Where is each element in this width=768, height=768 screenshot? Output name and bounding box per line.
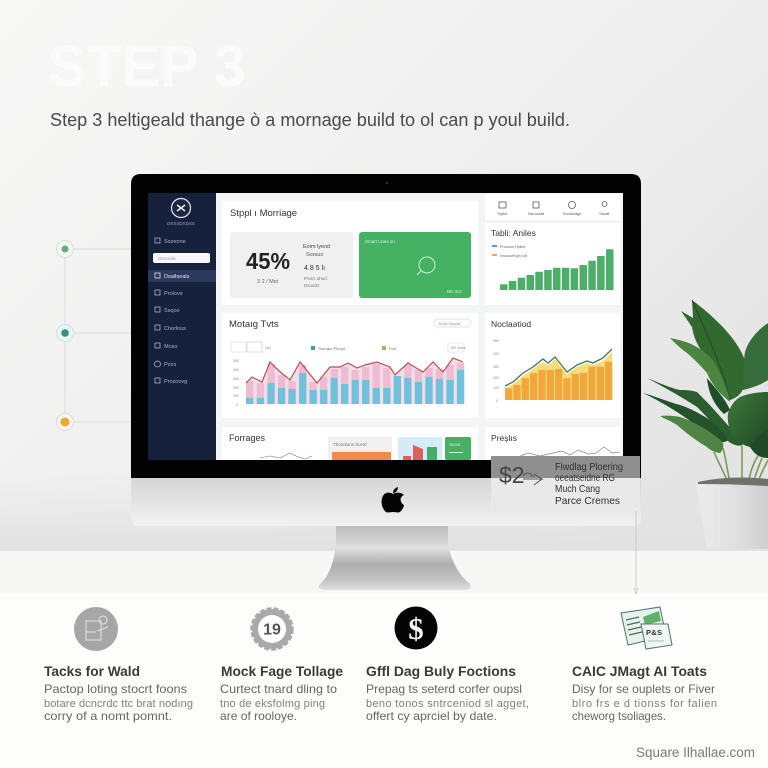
chart axis labels: 0: [236, 403, 238, 407]
panel: green bar chart: [485, 223, 620, 305]
chart controls: BS Sdcs: [451, 346, 466, 350]
stat card: Eoim lyend: [303, 244, 330, 250]
green trend line: [505, 349, 612, 386]
sidebar menu: Prosoovg: [164, 379, 187, 385]
heading: CAIC JMagt AI Toats: [572, 664, 707, 679]
overlay text: oeeatseidne RG: [555, 473, 615, 484]
body text: blro frs e d tionss for falien: [572, 698, 717, 710]
panel: orange area chart: [485, 313, 620, 418]
stat card: Dsoulst: [304, 283, 320, 288]
overlay text: Fiwdlag Ploering: [555, 462, 623, 473]
icon: documents: [621, 607, 672, 649]
body text: botare dcncrdc ttc brat nodıng: [44, 698, 193, 710]
screen: [148, 193, 623, 460]
pink area: [246, 358, 463, 404]
red trend line: [246, 358, 463, 383]
plant pot: [696, 478, 768, 549]
gray sub card: Thorstlons SuHd: [333, 442, 367, 447]
heading: Gffl Dag Buly Foctions: [366, 664, 516, 679]
chart axis labels: 200: [233, 386, 239, 390]
green bars: [500, 249, 614, 290]
big percentage: 45%: [246, 248, 290, 274]
chart axis labels: 400: [493, 352, 499, 356]
search box: Dsrcsork: [158, 256, 176, 261]
body text: [220, 682, 337, 723]
stat card: 3 2 / Mst: [257, 279, 279, 285]
sidebar brand: DSSSDSDSS: [167, 221, 195, 226]
chart controls: Sweıgsr Pleqırt: [318, 346, 346, 351]
icon: dollar badge: $: [408, 611, 424, 646]
chart axis labels: 400: [233, 368, 239, 372]
overlay caption card: [491, 456, 640, 511]
chart axis labels: 300: [493, 365, 499, 369]
overlay text: Much Cang: [555, 484, 600, 495]
body text: Pactop loting stocrt foons: [44, 682, 187, 696]
column: mock page: [220, 608, 343, 723]
stat card: 4.8 5 lı: [304, 265, 325, 272]
overlay text: Parce Cremes: [555, 496, 620, 507]
body text: are of rooloye.: [220, 709, 297, 723]
wall shadow: [0, 470, 768, 552]
pink bars: [246, 363, 464, 404]
chart controls: [231, 342, 466, 352]
body text: corry of a nomt pomnt.: [44, 709, 172, 723]
stat card: Procs ahud: [304, 276, 327, 281]
monitor chin: [131, 478, 641, 526]
filter pill: [434, 319, 471, 327]
panel heading: Stppl ı Morriage: [230, 208, 297, 219]
body text: beno tonos sntrceniod sl agget,: [366, 698, 529, 710]
monitor: [131, 174, 641, 526]
stat card: Sorsus: [306, 252, 323, 258]
column: tasks: [44, 607, 193, 723]
heading: Mock Fage Tollage: [221, 664, 343, 679]
chart controls: Tmd: [388, 346, 396, 351]
green card: Bls 3oz: [447, 289, 463, 294]
node: teal: [56, 324, 74, 342]
body text: offert cy aprciel by date.: [366, 709, 497, 723]
sidebar logo: [172, 198, 190, 218]
chart axis labels: [233, 359, 239, 407]
green card: [359, 232, 471, 298]
sidebar menu: Sozeone: [164, 239, 186, 245]
panel: icon toolbar: Toptot: [497, 212, 508, 216]
sidebar menu: [154, 238, 190, 385]
panel heading: Forrages: [229, 433, 266, 443]
node: green: [56, 240, 74, 258]
overlay text: [555, 462, 623, 507]
green card: Smart Uses on: [365, 239, 395, 244]
chart heading: Motaıg Tvts: [229, 319, 279, 330]
desk surface: [0, 551, 768, 593]
apple logo: [382, 487, 404, 512]
subtitle: Step 3 heltigeald thange ò a mornage build to ol can p youl build.: [50, 110, 570, 130]
panel: mixed chart: [222, 313, 478, 418]
monitor stand: [319, 526, 471, 590]
chart heading: Tabli: Aniles: [491, 228, 536, 238]
mini line: [518, 447, 620, 457]
sidebar menu: Prolove: [164, 291, 183, 297]
chart axis labels: 300: [233, 377, 239, 381]
camera: [386, 182, 388, 184]
background wall: [0, 0, 768, 552]
sidebar menu: Moso: [164, 344, 177, 350]
body text: Prepag ts seterd corfer oupsl: [366, 682, 522, 696]
panel: lower left: [222, 427, 478, 460]
body text: cheworg tsoliages.: [572, 709, 666, 723]
sidebar menu: Poxs: [164, 362, 176, 368]
body text: [572, 682, 717, 723]
chart axis labels: [493, 339, 499, 403]
green sub card: Sxoot: [449, 442, 461, 447]
blue sub card: [398, 437, 442, 460]
chart legend: [492, 245, 528, 258]
plant: [643, 300, 768, 549]
chart axis labels: 100: [233, 394, 239, 398]
chart axis labels: 100: [493, 386, 499, 390]
search box: [153, 253, 210, 263]
active row: [148, 270, 216, 282]
chart axis labels: 200: [493, 376, 499, 380]
node: orange: [56, 414, 74, 430]
body text: tno de eksfolmg ping: [220, 698, 325, 710]
title: STEP 3: [48, 34, 246, 99]
chart axis labels: 0: [496, 399, 498, 403]
icon: gear badge: 19: [263, 622, 281, 638]
sidebar menu: Ssqoo: [164, 308, 180, 314]
sidebar menu: Chorlous: [164, 326, 186, 332]
overlay price: $2: [499, 462, 525, 488]
plant stems: [714, 446, 768, 485]
body text: [366, 682, 529, 723]
body text: [44, 682, 193, 723]
panel: icon toolbar: [485, 194, 620, 220]
stat card: [230, 232, 353, 298]
column: caic: [572, 607, 717, 723]
panel: lower right: [485, 427, 620, 460]
chart legend: Insoslorfugh rolf: [500, 254, 528, 258]
timeline connectors: [56, 240, 131, 430]
gray sub card: [328, 437, 392, 460]
heading: Tacks for Wald: [44, 664, 140, 679]
panel: icon toolbar: Tosott: [599, 212, 610, 216]
panel: icon toolbar: Toordcrdge: [562, 212, 582, 216]
chart controls: Nsl: [265, 345, 271, 350]
monitor bezel: [131, 174, 641, 478]
column: gift: [366, 606, 529, 723]
orange bars: [505, 362, 612, 400]
icon: dollar badge: [394, 606, 438, 650]
panel: summary: [222, 201, 478, 305]
yellow area: [505, 352, 612, 400]
icon: device: [74, 607, 118, 651]
overlay arrow: [523, 473, 542, 485]
chart axis labels: 500: [493, 339, 499, 343]
sidebar menu: Dsaltseals: [164, 274, 190, 280]
sidebar: [148, 193, 216, 460]
mini line: [260, 453, 312, 459]
body text: Disy for se ouplets or Fiver: [572, 682, 715, 696]
body text: Curtect tnard dling to: [220, 682, 337, 696]
chart axis labels: 500: [233, 359, 239, 363]
bottom band: [0, 593, 768, 768]
panel: icon toolbar: Ssmorstd: [528, 212, 544, 216]
blue bars: [246, 370, 464, 404]
icon: documents: P&S: [646, 628, 662, 637]
arrow to bottom: [634, 511, 638, 594]
plant leaves: [643, 300, 768, 458]
filter pill: Buvlt Soorstl: [439, 322, 460, 326]
chart legend: Proosos Hyline: [500, 245, 526, 249]
panel heading: Preşlıs: [491, 433, 517, 443]
chart heading: Noclaətiod: [491, 319, 531, 329]
green sub card: [445, 437, 471, 460]
footer credit: Square Ilhallae.com: [636, 745, 755, 760]
